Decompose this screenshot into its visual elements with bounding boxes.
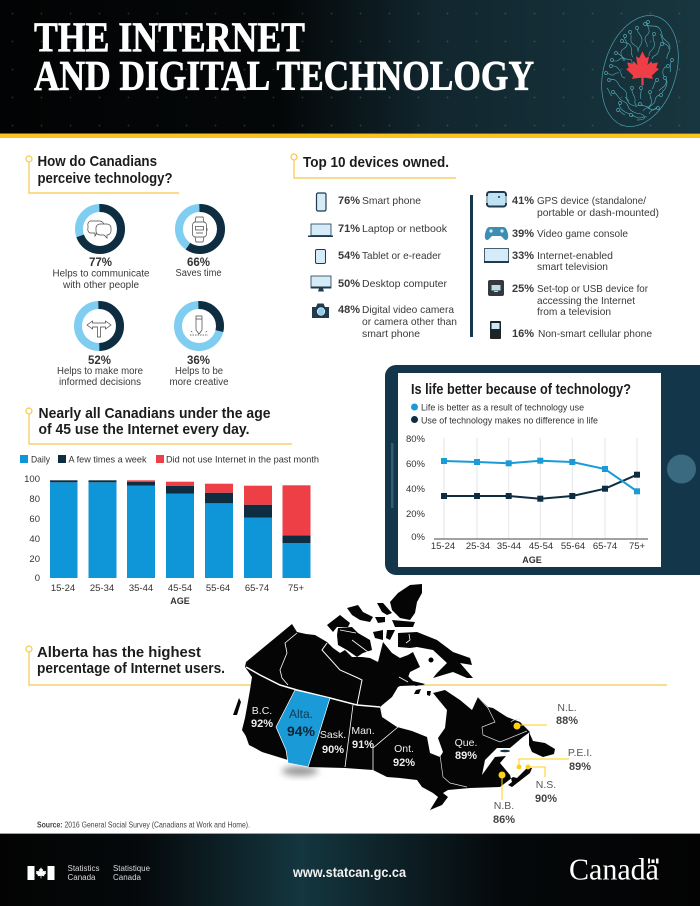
label: B.C.: B.C. — [252, 705, 272, 717]
label: informed decisions: Helps to make more — [57, 366, 143, 377]
x axis labels: 65-74 — [245, 583, 269, 594]
x axis labels: 25-34 — [466, 541, 490, 552]
department names: Statistique — [113, 864, 151, 873]
icon: tablet — [316, 250, 326, 264]
device: cellular phone: Non-smart cellular phone — [538, 328, 652, 340]
device: smart television — [512, 250, 613, 273]
department names: Canada — [113, 873, 142, 882]
panel: daily internet use bar chart — [20, 405, 319, 606]
footer band — [0, 833, 700, 906]
heading: nearly all Canadians: of 45 use the Internet every day. — [38, 421, 250, 438]
y axis labels: 20 — [29, 554, 40, 565]
device: set-top box — [512, 283, 648, 318]
label: B.C.: 92% — [251, 718, 273, 730]
heading: top 10 devices — [291, 154, 456, 178]
legend: internet use — [20, 454, 319, 466]
title — [34, 16, 534, 100]
device: digital camera: 48% — [338, 304, 360, 316]
legend: internet use: A few times a week — [68, 454, 147, 466]
y axis labels: 0 — [35, 573, 40, 584]
icon: set-top box — [488, 280, 504, 296]
device: digital camera — [338, 304, 457, 340]
device: digital camera: Digital video camera — [362, 304, 454, 316]
label: Sask. — [320, 729, 346, 756]
icon: smart phone — [316, 193, 326, 211]
device: set-top box: Set-top or USB device for — [537, 283, 648, 295]
Canada wordmark: Canada — [569, 852, 659, 886]
x axis labels: AGE — [170, 596, 190, 606]
y axis labels: 60% — [406, 459, 426, 470]
label: communicate: 77% — [89, 257, 112, 269]
panel: top 10 devices owned — [291, 154, 659, 340]
heading: perceive technology: perceive technology? — [38, 170, 172, 187]
y axis labels: 80 — [29, 494, 40, 505]
map: Canada — [233, 584, 592, 826]
label: communicate — [52, 257, 150, 291]
device: cellular phone: 16% — [512, 328, 534, 340]
label: informed decisions — [57, 355, 143, 388]
callout: P.E.I.: P.E.I. — [568, 747, 592, 759]
label: saves time: Saves time — [176, 268, 222, 279]
icon: Canadian flag signature — [28, 866, 54, 880]
heading: perceive technology: How do Canadians — [38, 153, 157, 170]
heading: nearly all Canadians: Nearly all Canadians under the age — [38, 405, 270, 422]
legend: internet use: Did not use Internet in the past month — [166, 454, 319, 466]
legend: life better — [411, 402, 598, 426]
y axis labels: 20% — [406, 509, 426, 520]
callout: N.L. — [514, 702, 578, 730]
label: Alta.: 94% — [287, 723, 316, 739]
label: Que.: 89% — [455, 750, 477, 762]
device: GPS — [512, 195, 659, 219]
heading: is life better: Is life better because of technology? — [411, 381, 631, 398]
device: laptop: 71% — [338, 223, 360, 235]
divider: device columns — [470, 195, 473, 337]
label: Ont. — [393, 743, 415, 769]
device: desktop: Desktop computer — [362, 278, 447, 290]
callout: N.B.: N.B. — [494, 800, 514, 812]
icon: laptop — [308, 224, 333, 237]
x axis labels: 35-44 — [129, 583, 153, 594]
x axis labels: 15-24 — [51, 583, 75, 594]
label: Sask.: Sask. — [320, 729, 346, 741]
device: smart television: smart television — [537, 261, 608, 273]
donut: communicate 77% — [79, 208, 121, 250]
label: Ont.: 92% — [393, 757, 415, 769]
label: creative: Helps to be — [175, 366, 223, 377]
device: smart television: 33% — [512, 250, 534, 262]
callout: N.L.: 88% — [556, 715, 578, 727]
icon: camera — [312, 304, 329, 318]
department names — [68, 864, 151, 882]
x axis labels: 15-24 — [431, 541, 455, 552]
label: Sask.: 90% — [322, 744, 344, 756]
department names: Canada — [68, 873, 96, 882]
icon: smart television — [484, 248, 509, 263]
label: Ont.: Ont. — [394, 743, 414, 755]
icon: game controller — [485, 227, 508, 240]
x axis labels: 55-64 — [206, 583, 230, 594]
title: THE INTERNET — [34, 16, 305, 62]
label: Que. — [455, 737, 477, 762]
label: Alta.: Alta. — [289, 707, 313, 721]
device: smart phone: 76% — [338, 195, 360, 207]
device: tablet: Tablet or e-reader — [362, 250, 441, 262]
device: laptop: Laptop or netbook — [362, 223, 448, 235]
label: Man.: Man. — [351, 725, 375, 737]
callout: N.S. — [526, 764, 557, 805]
donut: saves time 66% — [179, 208, 221, 250]
x axis labels: 45-54 — [168, 583, 192, 594]
label: communicate: with other people — [62, 280, 139, 291]
y axis labels: 40% — [406, 484, 426, 495]
label: creative — [170, 355, 229, 388]
device: game console: Video game console — [537, 228, 628, 240]
line chart: life better by age — [406, 434, 648, 565]
label: Man. — [351, 725, 375, 751]
x axis labels — [51, 583, 305, 606]
label: creative: more creative — [170, 377, 229, 388]
label: Man.: 91% — [352, 739, 374, 751]
x axis labels: 55-64 — [561, 541, 585, 552]
device: tablet: 54% — [338, 250, 360, 262]
y axis labels: 80% — [406, 434, 426, 445]
callout: N.S.: N.S. — [536, 779, 556, 791]
x axis labels: 75+ — [288, 583, 305, 594]
device: GPS: 41% — [512, 195, 534, 207]
device: smart television: Internet-enabled — [537, 250, 613, 262]
heading: Alberta has the highest — [26, 644, 667, 685]
heading: nearly all Canadians — [26, 405, 292, 444]
label: informed decisions: 52% — [88, 355, 111, 367]
x axis labels: 65-74 — [593, 541, 617, 552]
device: GPS: portable or dash-mounted) — [537, 207, 659, 219]
y axis labels — [406, 434, 426, 543]
icon: GPS — [487, 192, 506, 206]
province borders — [246, 630, 527, 787]
landmass — [233, 584, 555, 810]
callout: N.S.: 90% — [535, 793, 557, 805]
y axis labels: 60 — [29, 514, 40, 525]
bars — [50, 480, 310, 578]
device: desktop: 50% — [338, 278, 360, 290]
device: set-top box: 25% — [512, 283, 534, 295]
icon: cellular phone — [490, 321, 501, 339]
icon: circuit brain with maple leaf — [589, 6, 691, 136]
device: smart phone: Smart phone — [362, 195, 421, 207]
x axis labels — [431, 541, 646, 565]
device: digital camera: smart phone — [362, 328, 420, 340]
bar chart: internet use by age — [24, 474, 310, 606]
tablet frame — [385, 365, 700, 575]
callout: N.L.: N.L. — [557, 702, 577, 714]
label: saves time — [176, 257, 222, 279]
website: www.statcan.gc.ca — [292, 864, 406, 880]
donut: informed decisions 52% — [78, 305, 120, 347]
x axis labels: AGE — [522, 555, 542, 565]
label: Alta. — [287, 707, 316, 739]
device: GPS: GPS device (standalone/ — [537, 195, 646, 207]
y axis labels: 0% — [411, 532, 426, 543]
series: no difference — [441, 472, 640, 502]
department names: Statistics — [68, 864, 100, 873]
callout: P.E.I.: 89% — [569, 761, 591, 773]
callout: P.E.I. — [516, 747, 592, 773]
device: set-top box: accessing the Internet — [537, 295, 635, 307]
legend: life better: Use of technology makes no difference in life — [421, 416, 598, 426]
callout: N.B.: 86% — [493, 814, 515, 826]
series: life better — [441, 458, 640, 494]
province: Alberta highlight — [276, 690, 330, 767]
y axis labels: 40 — [29, 534, 40, 545]
label: informed decisions: informed decisions — [59, 377, 141, 388]
panel: tablet line chart — [385, 365, 700, 575]
heading: Alberta has the highest: Alberta has the highest — [37, 644, 201, 661]
donut: creative 36% — [178, 305, 220, 347]
label: creative: 36% — [187, 355, 210, 367]
legend: internet use: Daily — [31, 454, 50, 466]
x axis labels: 45-54 — [529, 541, 553, 552]
legend: life better: Life is better as a result of technology use — [421, 402, 584, 414]
source note: Source: 2016 General Social Survey (Canadians at Work and Home). — [37, 820, 250, 830]
x axis labels: 35-44 — [497, 541, 521, 552]
y axis labels: 100 — [24, 474, 40, 485]
label: B.C. — [251, 705, 273, 730]
title: AND DIGITAL TECHNOLOGY — [34, 54, 534, 100]
y axis labels — [24, 474, 40, 584]
heading: top 10 devices: Top 10 devices owned. — [303, 154, 449, 171]
device: game console: 39% — [512, 228, 534, 240]
icon: desktop — [311, 276, 331, 292]
label: Que.: Que. — [455, 737, 477, 749]
label: communicate: Helps to communicate — [52, 268, 150, 280]
device: set-top box: from a television — [537, 306, 611, 318]
device: digital camera: or camera other than — [362, 316, 457, 328]
heading: perceive technology — [26, 153, 179, 193]
callout: N.B. — [493, 772, 515, 826]
label: saves time: 66% — [187, 257, 210, 269]
x axis labels: 75+ — [629, 541, 646, 552]
header banner — [0, 0, 700, 138]
x axis labels: 25-34 — [90, 583, 114, 594]
shadow under Alberta — [282, 766, 318, 776]
heading: Alberta has the highest: percentage of Internet users. — [37, 660, 225, 677]
panel: how Canadians perceive technology — [26, 153, 229, 388]
